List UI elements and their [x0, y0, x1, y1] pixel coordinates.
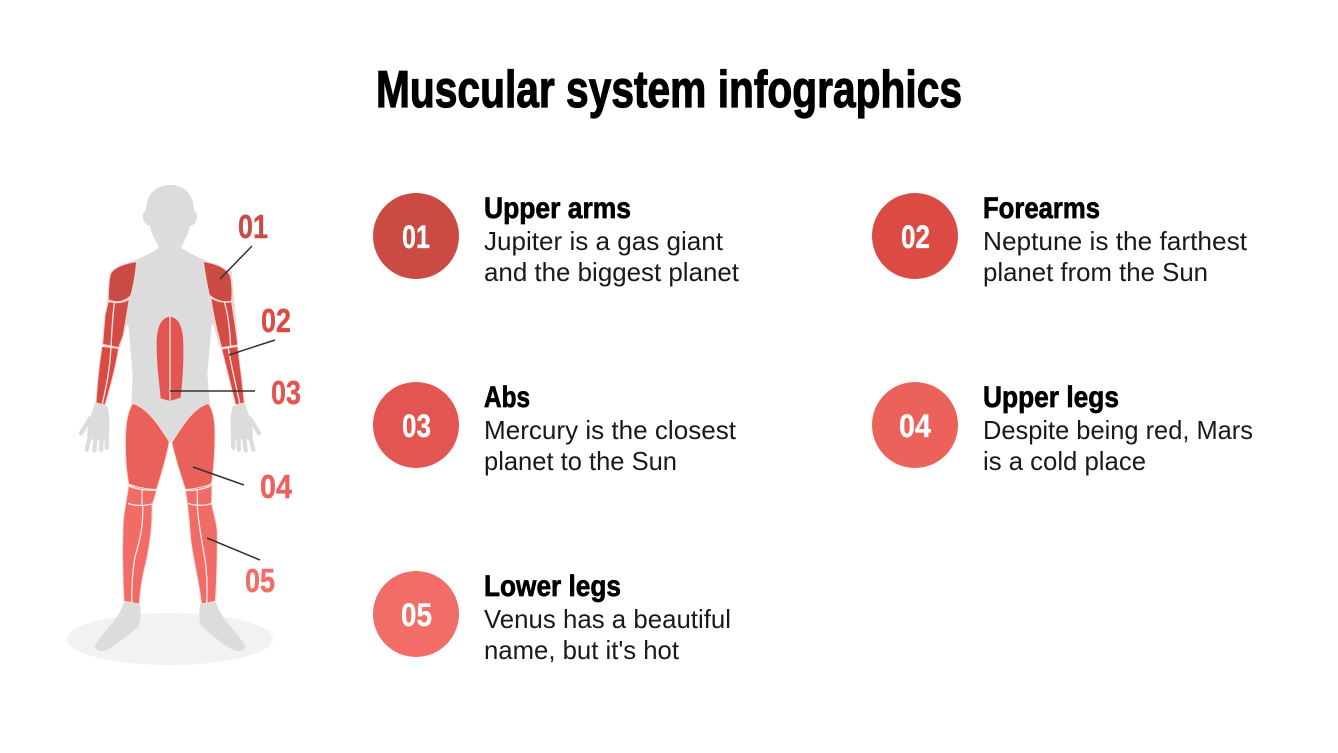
- title: Muscular system infographics: [376, 61, 962, 119]
- figure: human body with muscles: [67, 185, 301, 665]
- heading: Lower legs: Lower legs: [484, 570, 621, 603]
- icon: left hand: [81, 403, 110, 450]
- figure label 02: 02: [261, 302, 291, 339]
- badge number 03: 03: [402, 408, 431, 444]
- icon: right foot: [199, 602, 245, 651]
- item 01: upper arms: [373, 192, 740, 287]
- ground shadow: [67, 613, 273, 665]
- icon: right hand: [230, 403, 259, 450]
- number badge 02: [872, 193, 958, 279]
- number badge 04: [872, 382, 958, 468]
- figure label 04: 04: [260, 468, 293, 505]
- forearm muscles: [96, 298, 244, 405]
- item 02: forearms: [872, 192, 1248, 287]
- badge number 05: 05: [401, 597, 432, 633]
- description 04: is a cold place: [983, 446, 1146, 476]
- leader line 02: [229, 340, 275, 355]
- description 02: planet from the Sun: [983, 257, 1208, 287]
- description 01: Jupiter is a gas giant: [484, 226, 724, 256]
- lower leg muscles: [123, 485, 217, 604]
- item 05: lower legs: [373, 570, 731, 665]
- leader line 03: [170, 390, 255, 392]
- description 05: name, but it's hot: [484, 635, 680, 665]
- description 04: Despite being red, Mars: [983, 415, 1253, 445]
- icon: left foot: [95, 602, 141, 651]
- figure label 01: 01: [238, 208, 268, 245]
- description 03: planet to the Sun: [484, 446, 677, 476]
- heading: Upper legs: Upper legs: [983, 381, 1119, 414]
- item 04: upper legs: [872, 381, 1253, 476]
- number badge 03: [373, 382, 459, 468]
- description 05: Venus has a beautiful: [484, 604, 731, 634]
- number badge 05: [373, 571, 459, 657]
- body silhouette: [81, 185, 259, 651]
- heading: Upper arms: Upper arms: [484, 192, 631, 225]
- upper arm muscles: [108, 262, 232, 302]
- badge number 01: 01: [402, 219, 430, 255]
- description 01: and the biggest planet: [484, 257, 740, 287]
- leader line 04: [193, 467, 244, 485]
- badge number 02: 02: [901, 219, 930, 255]
- description 03: Mercury is the closest: [484, 415, 737, 445]
- heading: Abs: Abs: [484, 381, 530, 414]
- number badge 01: [373, 193, 459, 279]
- badge number 04: 04: [899, 408, 931, 444]
- leader line 01: [220, 246, 252, 279]
- figure label 03: 03: [271, 374, 301, 411]
- description 02: Neptune is the farthest: [983, 226, 1248, 256]
- item 03: abs: [373, 381, 737, 476]
- heading: Forearms: Forearms: [983, 192, 1100, 225]
- abs muscle: [157, 317, 183, 401]
- upper leg muscles: [125, 403, 215, 489]
- leader line 05: [207, 538, 260, 560]
- figure label 05: 05: [245, 562, 275, 599]
